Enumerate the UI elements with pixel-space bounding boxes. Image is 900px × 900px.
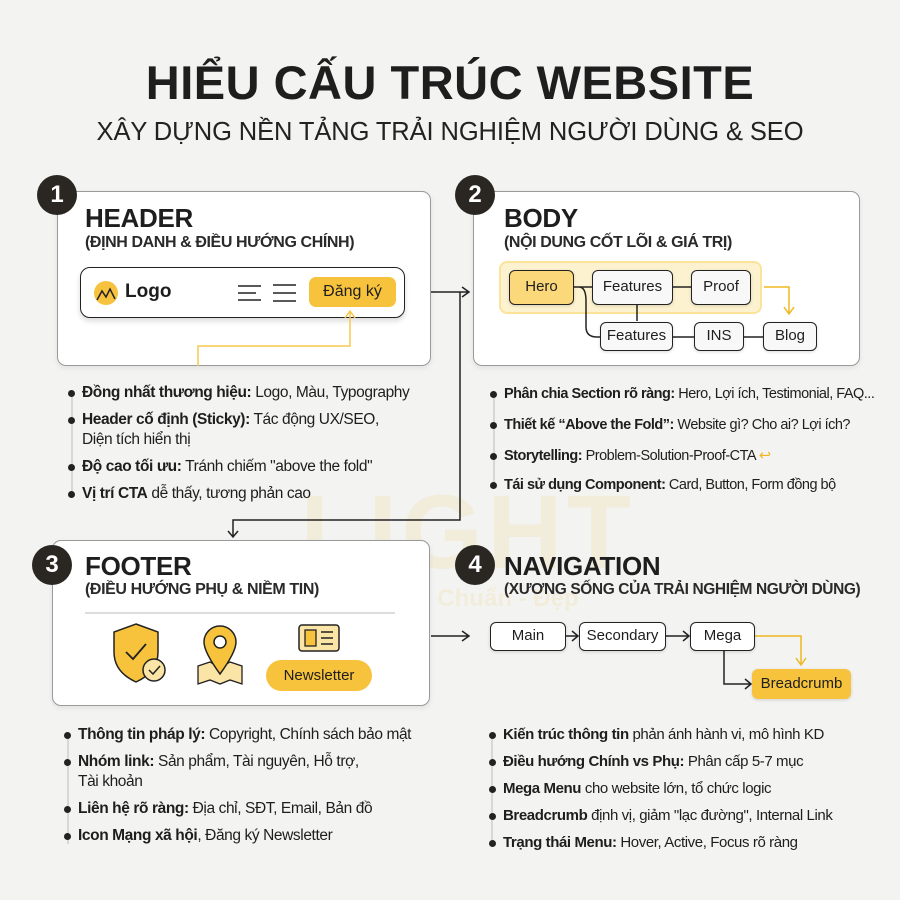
bullets: body: Thiết kế “Above the Fold”: Website gì? Cho ai? Lợi ích? — [504, 417, 850, 433]
box: Features 2: Features — [607, 327, 666, 344]
icon: shield — [113, 623, 166, 683]
panel: footer — [52, 540, 430, 706]
heading: header: HEADER — [85, 203, 193, 233]
box: INS — [694, 322, 744, 351]
subheading: footer: (ĐIỀU HƯỚNG PHỤ & NIỀM TIN) — [85, 581, 319, 598]
bullets: body: Phân chia Section rõ ràng: Hero, Lợi ích, Testimonial, FAQ... — [504, 386, 874, 402]
box: Proof: Proof — [703, 278, 739, 295]
button: Newsletter: Newsletter — [284, 667, 354, 684]
bullets: header: Diện tích hiển thị — [82, 431, 190, 448]
nav bar mockup — [80, 267, 405, 318]
bullets: navigation — [489, 726, 833, 851]
box: Features 2 — [600, 322, 673, 351]
button: Đăng ký: Đăng ký — [323, 283, 382, 300]
bullets: footer: Liên hệ rõ ràng: Địa chỉ, SĐT, Email, Bản đồ — [78, 800, 372, 817]
icon: map pin — [197, 625, 243, 685]
number 3 — [32, 545, 72, 585]
watermark: Nhanh - Chuẩn - Đẹp — [341, 585, 579, 612]
title: HIỂU CẤU TRÚC WEBSITE — [146, 56, 754, 109]
box: Breadcrumb: Breadcrumb — [761, 675, 842, 692]
subheading: body: (NỘI DUNG CỐT LÕI & GIÁ TRỊ) — [504, 234, 732, 251]
heading: body: BODY — [504, 203, 578, 233]
box: Hero — [509, 270, 574, 305]
icon: menu — [238, 284, 296, 302]
bullets: header: Vị trí CTA dễ thấy, tương phản cao — [82, 485, 311, 502]
box: Hero: Hero — [525, 278, 558, 295]
panel: header — [57, 191, 431, 366]
bullets: header: Độ cao tối ưu: Tránh chiếm "above the fold" — [82, 458, 372, 475]
logo text: Logo — [125, 281, 171, 302]
box: Blog: Blog — [775, 327, 805, 344]
bullets: footer: Icon Mạng xã hội, Đăng ký Newsletter — [78, 827, 332, 844]
heading: footer: FOOTER — [85, 551, 192, 581]
bullets: footer: Nhóm link: Sản phẩm, Tài nguyên, Hỗ trợ, — [78, 753, 359, 770]
panel: body — [473, 191, 860, 366]
number 1: 1 — [50, 181, 64, 208]
box: Secondary: Secondary — [587, 627, 658, 644]
subheading: header: (ĐỊNH DANH & ĐIỀU HƯỚNG CHÍNH) — [85, 234, 354, 251]
heading: navigation: NAVIGATION — [504, 551, 660, 581]
box: INS: INS — [706, 327, 732, 344]
number 2: 2 — [468, 181, 482, 208]
bullets: navigation: Trạng thái Menu: Hover, Active, Focus rõ ràng — [503, 834, 798, 851]
bullets: navigation: Kiến trúc thông tin phản ánh hành vi, mô hình KD — [503, 726, 824, 743]
subheading: navigation: (XƯƠNG SỐNG CỦA TRẢI NGHIỆM NGƯỜI DÙNG) — [504, 581, 860, 598]
box: Blog — [763, 322, 817, 351]
box: Secondary — [579, 622, 666, 651]
bullets: navigation: Điều hướng Chính vs Phụ: Phân cấp 5-7 mục — [503, 753, 803, 770]
box: Main: Main — [512, 627, 544, 644]
number 4: 4 — [468, 551, 482, 578]
bullets: header: Đồng nhất thương hiệu: Logo, Màu, Typography — [82, 384, 409, 401]
box: Mega: Mega — [704, 627, 741, 644]
bullets: footer: Tài khoản — [78, 773, 142, 790]
body diagram — [499, 261, 818, 353]
icon: logo — [94, 281, 118, 305]
subtitle: XÂY DỰNG NỀN TẢNG TRẢI NGHIỆM NGƯỜI DÙNG & SEO — [97, 118, 803, 146]
box: Features: Features — [603, 278, 662, 295]
bullets: navigation: Mega Menu cho website lớn, tổ chức logic — [503, 780, 771, 797]
button: Đăng ký — [309, 277, 396, 307]
watermark: LIGHT — [300, 474, 635, 591]
number 3: 3 — [45, 551, 59, 578]
number 4 — [455, 545, 495, 585]
box: Main — [490, 622, 566, 651]
box: Mega — [690, 622, 755, 651]
callout line: header — [197, 310, 356, 366]
number 1 — [37, 175, 77, 215]
bullets: header: Header cố định (Sticky): Tác động UX/SEO, — [82, 411, 379, 428]
bullets: body — [490, 386, 874, 493]
bullets: footer: Thông tin pháp lý: Copyright, Chính sách bảo mật — [78, 726, 411, 743]
button: Newsletter — [266, 660, 372, 691]
bullets: body: Storytelling: Problem-Solution-Proof-CTA ↩ — [504, 448, 770, 464]
bullets: body: Tái sử dụng Component: Card, Button, Form đồng bộ — [504, 477, 836, 493]
navigation flow — [489, 622, 852, 701]
bullets: header — [68, 384, 410, 502]
icon: newsletter — [298, 624, 340, 652]
box: Features — [592, 270, 673, 305]
box: Proof — [691, 270, 751, 305]
bullets: navigation: Breadcrumb định vị, giảm "lạc đường", Internal Link — [503, 807, 832, 824]
number 2 — [455, 175, 495, 215]
box: Breadcrumb — [752, 669, 851, 699]
bullets: footer — [64, 726, 412, 844]
